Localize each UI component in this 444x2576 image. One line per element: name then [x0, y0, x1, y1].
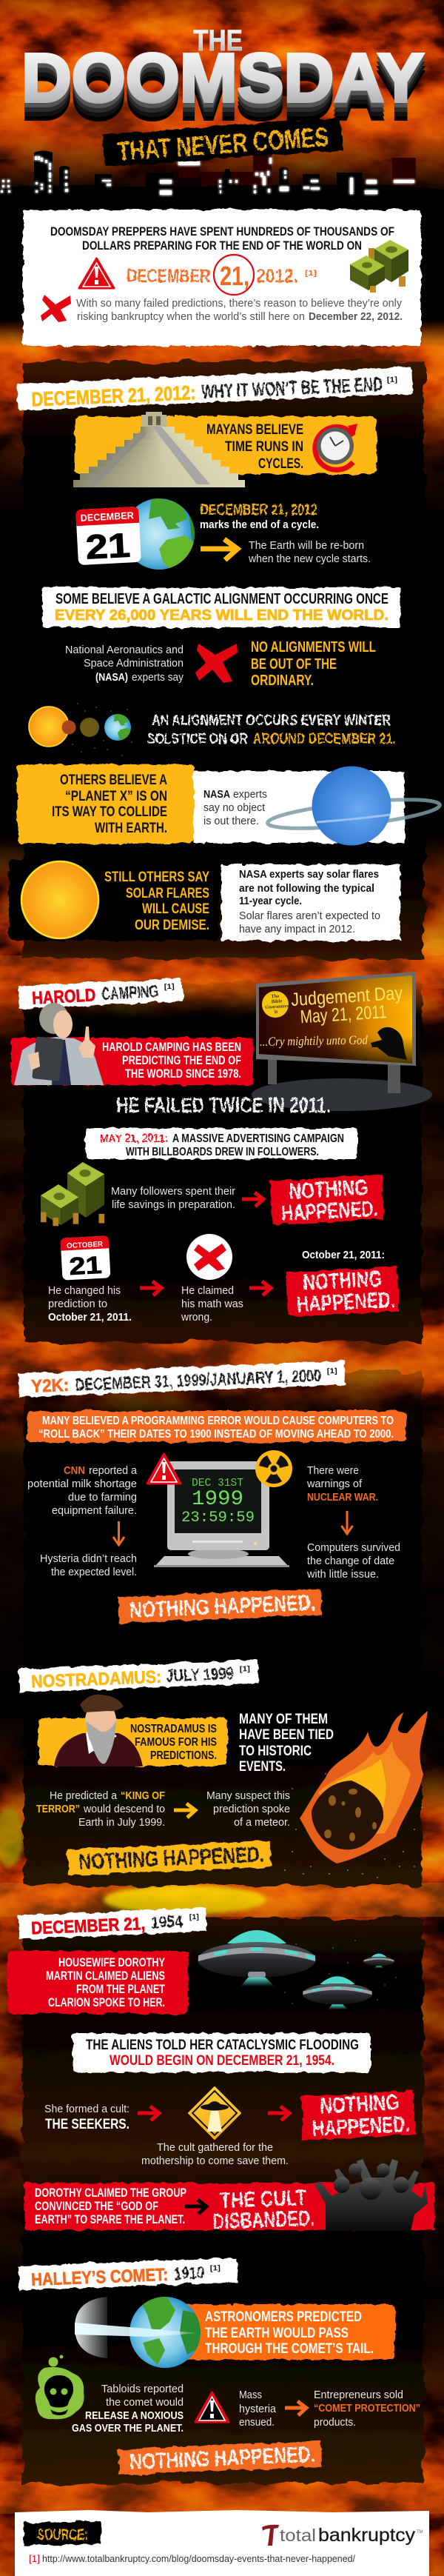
nuclear war text: warnings of: [306, 1478, 363, 1490]
nuclear war text: NUCLEAR WAR.: [307, 1492, 378, 1504]
date: december 21 2012: [1]: [305, 270, 317, 278]
section heading: nostradamus: [1]: [240, 1665, 250, 1674]
arrow: [174, 1803, 195, 1818]
intro body text: risking bankruptcy when the world’s still here on: [77, 310, 305, 323]
computers survived text: Computers survived: [307, 1542, 400, 1554]
disbanded reason text: EARTH” TO SPARE THE PLANET.: [35, 2213, 185, 2226]
tabloids text: Tabloids reported: [101, 2383, 184, 2395]
callout: nothing happened: [286, 1266, 400, 1318]
arrow: [140, 1281, 161, 1295]
followers text: [111, 1186, 235, 1211]
arrow: [268, 2106, 289, 2120]
computers survived text: [306, 1542, 400, 1581]
section heading: nostradamus: [18, 1660, 258, 1692]
panel: footer: [15, 2510, 429, 2576]
nostradamus text: NOSTRADAMUS IS: [130, 1723, 217, 1735]
intro headline: DOLLARS PREPARING FOR THE END OF THE WORLD ON: [82, 239, 362, 253]
callout: nothing happened: HAPPENED.: [280, 1196, 379, 1226]
no alignments text: NO ALIGNMENTS WILL: [251, 639, 376, 655]
panel: dorothy martin: [7, 1951, 188, 2014]
cycle subheading: marks the end of a cycle.: [200, 519, 319, 531]
solar response: [239, 869, 380, 935]
nostradamus text: PREDICTIONS.: [150, 1749, 217, 1762]
solar claim: SOLAR FLARES: [126, 885, 209, 901]
followers text: life savings in preparation.: [112, 1199, 235, 1211]
illustration: planet x with rings: [266, 766, 441, 846]
panel: may 21 2011 banner: WITH BILLBOARDS DREW IN FOLLOWERS.: [126, 1146, 319, 1158]
planet x claim: [52, 772, 167, 836]
nasa response: NASA: [204, 789, 230, 801]
illustration: ufos: [198, 1930, 396, 2009]
text: changed prediction: [48, 1285, 132, 1324]
illustration: billboard: The: [271, 994, 280, 999]
icon: x in circle: [186, 1234, 232, 1280]
section heading: halley's comet: HALLEY’S COMET:: [31, 2265, 169, 2290]
icon: calendar october 21: 21: [69, 1251, 102, 1280]
the cult disbanded text: [212, 2186, 315, 2234]
panel: solar flares: [9, 859, 400, 941]
solar claim: [104, 869, 209, 933]
illustration: y2k computer: 1999: [192, 1488, 243, 1511]
arrow: [242, 1192, 263, 1207]
disbanded reason text: CONVINCED THE “GOD OF: [35, 2200, 158, 2213]
arrow: [285, 2401, 306, 2415]
planet x claim: “PLANET X” IS ON: [65, 788, 167, 804]
title word: doomsday: DOOMSDAY: [21, 39, 424, 116]
illustration: sun: [21, 861, 98, 938]
cycle date heading: DECEMBER 21, 2012: [200, 501, 317, 518]
section heading: halley's comet: 1910: [174, 2263, 204, 2283]
alignment statement: [147, 713, 396, 747]
no alignments text: ORDINARY.: [251, 673, 314, 689]
historic events text: HAVE BEEN TIED: [239, 1726, 334, 1743]
panel: nostradamus: [38, 1695, 227, 1766]
logo: total bankruptcy: bankruptcy: [318, 2525, 416, 2546]
arrow: [138, 2106, 159, 2120]
solar claim: OUR DEMISE.: [135, 917, 209, 933]
planet x claim: OTHERS BELIEVE A: [60, 772, 167, 788]
section heading: december 21 2012: [18, 367, 413, 411]
hysteria text: Hysteria didn’t reach: [40, 1553, 137, 1565]
text: changed prediction: prediction to: [48, 1298, 107, 1310]
logo: total bankruptcy: TM: [417, 2530, 423, 2535]
hysteria text: the expected level.: [51, 1566, 137, 1578]
rebirth text: when the new cycle starts.: [248, 553, 371, 565]
panel: harold intro: [11, 1003, 253, 1085]
callout: nothing happened: NOTHING: [289, 1175, 369, 1204]
panel: may 21 2011 banner: MAY 21, 2011:: [100, 1132, 168, 1145]
astronomers text: [205, 2309, 374, 2357]
followers text: Many followers spent their: [111, 1186, 235, 1198]
illustration: billboard: [252, 972, 432, 1111]
mass hysteria text: ensued.: [239, 2417, 275, 2429]
intro headline: [50, 225, 394, 253]
alignment statement: AROUND DECEMBER 21.: [253, 731, 396, 747]
harold intro text: THE WORLD SINCE 1978.: [125, 1067, 241, 1081]
ufo small: [363, 1954, 394, 1968]
title: [21, 24, 424, 167]
solar response: have any impact in 2012.: [239, 924, 355, 935]
nasa says text: National Aeronautics and: [65, 644, 184, 656]
section heading: december 21 1954: [1]: [189, 1913, 199, 1922]
nasa response: say no object: [204, 802, 265, 814]
computers survived text: with little issue.: [306, 1569, 379, 1581]
panel: y2k belief: [27, 1411, 406, 1442]
icon: money stacks: [350, 240, 408, 293]
callout: nothing happened: HAPPENED.: [312, 2112, 411, 2141]
prediction text: would descend to: [83, 1803, 165, 1815]
icon: warning triangle: [195, 2392, 229, 2422]
hysteria text: [40, 1553, 137, 1578]
section heading: december 21 1954: 1954: [150, 1912, 184, 1932]
nuclear war text: [306, 1465, 378, 1504]
tabloids text: the comet would: [106, 2397, 184, 2409]
source citation: http://www.totalbankruptcy.com/blog/doomsday-events-that-never-happened/: [42, 2553, 355, 2564]
section heading: december 21 2012: [1]: [387, 376, 397, 384]
planet x claim: WITH EARTH.: [95, 820, 167, 836]
solar claim: WILL CAUSE: [142, 901, 209, 917]
illustration: billboard: May 21, 2011: [300, 1001, 387, 1027]
tabloids text: RELEASE A NOXIOUS: [85, 2410, 184, 2422]
icon: warning triangle: [147, 1454, 181, 1484]
icon: calendar december 21: DECEMBER: [80, 510, 135, 524]
logo: total bankruptcy: total: [280, 2526, 316, 2545]
icon: calendar october 21: [61, 1235, 110, 1281]
alignment statement: SOLSTICE ON OR: [147, 731, 248, 747]
text: changed prediction: October 21, 2011.: [48, 1312, 132, 1324]
entrepreneurs text: [314, 2389, 420, 2429]
solar response: Solar flares aren’t expected to: [239, 910, 380, 922]
date: october 21 2011: October 21, 2011:: [302, 1249, 385, 1261]
dark panel: 1954 and halley sections: [22, 1918, 423, 2483]
callout: nothing happened: NOTHING HAPPENED.: [129, 2443, 316, 2475]
illustration: meteor: [285, 1711, 428, 1878]
icon: calendar december 21: [75, 507, 141, 567]
no alignments text: [251, 639, 376, 689]
mothership text: [141, 2142, 289, 2167]
section heading: y2k: Y2K:: [31, 1375, 70, 1397]
text: math wrong: He claimed: [181, 1285, 234, 1297]
illustration: billboard: ...Cry mightily unto God: [260, 1032, 368, 1049]
nasa response: is out there.: [204, 815, 259, 827]
callout: nothing happened: HAPPENED.: [296, 1287, 396, 1317]
astronomers text: THROUGH THE COMET’S TAIL.: [205, 2340, 374, 2357]
section heading: halley's comet: [1]: [210, 2264, 221, 2273]
dark panel: december 21 2012 section: [23, 361, 424, 958]
illustration: crowd: [314, 2159, 428, 2231]
seekers text: THE SEEKERS.: [45, 2117, 130, 2132]
callout: nothing happened: NOTHING HAPPENED.: [78, 1843, 265, 1875]
panel: cult disbanded: [24, 2159, 434, 2234]
source citation: [1]: [29, 2553, 40, 2564]
mayans text: CYCLES.: [258, 456, 303, 472]
the cult disbanded text: DISBANDED.: [212, 2206, 315, 2234]
historic events text: MANY OF THEM: [239, 1711, 328, 1727]
icon: warning triangle: [79, 258, 114, 288]
cnn text: reported a: [89, 1465, 138, 1477]
mayans text: TIME RUNS IN: [225, 438, 303, 455]
entrepreneurs text: products.: [314, 2417, 356, 2429]
tabloids text: [72, 2383, 184, 2435]
disbanded reason text: DOROTHY CLAIMED THE GROUP: [35, 2186, 186, 2200]
text: math wrong: [181, 1285, 243, 1324]
rebirth text: [248, 540, 371, 565]
icon: calendar october 21: OCTOBER: [67, 1241, 104, 1250]
the cult disbanded text: THE CULT: [220, 2186, 307, 2213]
seekers text: [44, 2103, 130, 2132]
arrow: [249, 1281, 271, 1295]
planet x claim: ITS WAY TO COLLIDE: [52, 804, 167, 820]
panel: dorothy martin: FROM THE PLANET: [76, 1983, 165, 1996]
callout: nothing happened: NOTHING: [302, 1267, 383, 1295]
nasa response: experts: [233, 789, 267, 801]
arrow: [185, 2200, 206, 2214]
historic events text: [239, 1711, 334, 1775]
alignment statement: AN ALIGNMENT OCCURS EVERY WINTER: [152, 713, 391, 729]
callout: nothing happened: [300, 2089, 416, 2142]
section heading: halley's comet: [18, 2258, 238, 2291]
callout: nothing happened: [270, 1175, 385, 1227]
illustration: nostradamus portrait: [54, 1695, 143, 1766]
historic events text: EVENTS.: [239, 1758, 286, 1775]
nasa says text: Space Administration: [84, 658, 184, 670]
nasa says text: (NASA): [95, 672, 128, 684]
section heading: y2k: DECEMBER 31, 1999/JANUARY 1, 2000: [75, 1366, 321, 1395]
icon: calendar december 21: 21: [84, 525, 131, 567]
icon: ufo road sign: [189, 2087, 240, 2139]
section heading: y2k: [18, 1361, 345, 1397]
panel: end of a cycle: [75, 497, 371, 573]
historic events text: TO HISTORIC: [239, 1743, 312, 1759]
source label: [24, 2521, 101, 2546]
nostradamus text: FAMOUS FOR HIS: [135, 1736, 217, 1749]
disbanded reason text: [35, 2186, 186, 2226]
harold intro text: [102, 1041, 241, 1081]
nasa says text: experts say: [132, 672, 184, 684]
meteor suspicion text: prediction spoke: [213, 1803, 290, 1815]
illustration: billboard: Guarantees: [265, 1004, 289, 1010]
logo: total bankruptcy: [262, 2525, 423, 2546]
section heading: december 21 2012: DECEMBER 21, 2012:: [31, 381, 196, 411]
section heading: harold camping: [1]: [164, 983, 175, 991]
panel: mayans: [73, 412, 377, 487]
section heading: nostradamus: NOSTRADAMUS:: [31, 1667, 162, 1692]
illustration: comet and earth: [75, 2294, 202, 2368]
cnn text: CNN: [64, 1465, 85, 1477]
panel: planet x: [18, 764, 441, 846]
panel: dorothy martin: HOUSEWIFE DOROTHY: [58, 1956, 165, 1969]
illustration: billboard: Judgement Day: [290, 983, 403, 1010]
prediction text: “KING OF: [121, 1790, 165, 1802]
mayans text: MAYANS BELIEVE: [206, 421, 303, 438]
ufo large: [198, 1930, 316, 1986]
dark panel: harold camping section: [24, 982, 422, 1342]
mass hysteria text: Mass: [239, 2389, 262, 2401]
cnn text: potential milk shortage: [27, 1478, 137, 1490]
solar claim: STILL OTHERS SAY: [104, 869, 209, 885]
cnn text: equipment failure.: [52, 1505, 137, 1517]
text: math wrong: wrong.: [181, 1312, 212, 1324]
meteor suspicion text: of a meteor.: [234, 1817, 290, 1829]
mayans text: [206, 421, 303, 472]
entrepreneurs text: “COMET PROTECTION”: [314, 2403, 420, 2415]
mass hysteria text: [239, 2389, 277, 2429]
icon: radiation sign: [255, 1450, 292, 1487]
mothership text: The cult gathered for the: [157, 2142, 273, 2154]
no alignments text: BE OUT OF THE: [251, 656, 337, 673]
cnn text: due to farming: [68, 1492, 137, 1504]
intro body text: With so many failed predictions, there’s reason to believe they’re only: [76, 297, 402, 310]
nasa response: [204, 789, 267, 827]
illustration: y2k computer: [147, 1450, 292, 1567]
solar response: NASA experts say solar flares: [239, 869, 379, 881]
arrow: [201, 539, 238, 560]
entrepreneurs text: Entrepreneurs sold: [314, 2389, 403, 2401]
panel: cataclysmic flooding: WOULD BEGIN ON DECEMBER 21, 1954.: [110, 2053, 334, 2069]
section heading: y2k: [1]: [327, 1367, 337, 1375]
tabloids text: GAS OVER THE PLANET.: [72, 2423, 184, 2435]
text: changed prediction: He changed his: [48, 1285, 121, 1297]
panel: cataclysmic flooding: [73, 2033, 371, 2072]
illustration: harold camping: [14, 1003, 104, 1085]
callout: nothing happened: NOTHING: [319, 2090, 400, 2119]
arrow: [113, 1521, 124, 1545]
dark panel: y2k and nostradamus sections: [24, 1372, 422, 1886]
date: december 21 2012: 21,: [220, 261, 249, 291]
nostradamus text: [130, 1723, 217, 1762]
prediction text: TERROR”: [36, 1803, 80, 1815]
panel: dorothy martin: MARTIN CLAIMED ALIENS: [46, 1969, 165, 1983]
icon: toxic gas cloud with skull: [36, 2355, 84, 2419]
source label: SOURCE:: [37, 2526, 88, 2543]
meteor suspicion text: Many suspect this: [206, 1790, 290, 1802]
cnn text: [27, 1465, 138, 1517]
panel: astronomers: [75, 2294, 395, 2368]
city skyline: [0, 151, 444, 215]
icon: red x: [195, 644, 238, 683]
prediction text: He predicted a: [50, 1790, 118, 1802]
icon: red x: [41, 295, 71, 322]
date: december 21 2012: DECEMBER: [127, 266, 210, 287]
arrow: [342, 1511, 352, 1534]
mothership text: mothership to come save them.: [141, 2155, 289, 2167]
harold intro text: PREDICTING THE END OF: [122, 1054, 241, 1067]
panel: may 21 2011 banner: [85, 1128, 357, 1159]
solar response: 11-year cycle.: [239, 895, 302, 907]
panel: may 21 2011 banner: A MASSIVE ADVERTISING CAMPAIGN: [172, 1132, 344, 1145]
illustration: planets aligned: [29, 704, 132, 755]
ufo medium: [303, 1976, 372, 2009]
intro body text: [76, 297, 403, 323]
illustration: billboard: It: [274, 1010, 278, 1015]
harold intro text: HAROLD CAMPING HAS BEEN: [102, 1041, 241, 1054]
panel: galactic alignment: EVERY 26,000 YEARS WILL END THE WORLD.: [55, 607, 388, 624]
section heading: nostradamus: JULY 1999: [166, 1664, 234, 1686]
icon: money stacks: [41, 1162, 104, 1226]
title word: the: THE: [193, 24, 243, 57]
seekers text: She formed a cult:: [44, 2103, 130, 2115]
solar response: are not following the typical: [239, 883, 374, 895]
illustration: billboard: Bible: [272, 999, 283, 1004]
computers survived text: the change of date: [307, 1555, 394, 1567]
illustration: y2k computer: 23:59:59: [181, 1509, 255, 1526]
astronomers text: ASTRONOMERS PREDICTED: [205, 2309, 362, 2325]
nasa says text: [65, 644, 184, 684]
panel: cataclysmic flooding: THE ALIENS TOLD HER CATACLYSMIC FLOODING: [86, 2038, 359, 2053]
meteor suspicion text: [206, 1790, 290, 1829]
section heading: harold camping: HAROLD: [32, 985, 96, 1009]
astronomers text: THE EARTH WOULD PASS: [205, 2325, 349, 2341]
heading: he failed twice: HE FAILED TWICE IN 2011.: [116, 1094, 331, 1118]
title banner: that never comes: THAT NEVER COMES: [116, 121, 329, 167]
mass hysteria text: hysteria: [239, 2403, 277, 2415]
text: math wrong: his math was: [181, 1298, 243, 1310]
panel: dorothy martin: CLARION SPOKE TO HER.: [48, 1996, 165, 2009]
icon: clock: [315, 424, 357, 470]
section heading: harold camping: CAMPING: [101, 981, 159, 1004]
section heading: december 21 1954: DECEMBER 21,: [31, 1914, 146, 1939]
illustration: pyramid: [73, 412, 245, 487]
panel: intro: [23, 210, 421, 346]
date: december 21 2012: [127, 255, 317, 295]
date: december 21 2012: 2012.: [256, 266, 298, 287]
illustration: y2k computer: DEC 31ST: [192, 1477, 243, 1489]
section heading: harold camping: [18, 978, 183, 1010]
prediction text: Earth in July 1999.: [78, 1817, 165, 1829]
rebirth text: The Earth will be re-born: [249, 540, 364, 552]
nuclear war text: There were: [307, 1465, 359, 1477]
prediction text: [36, 1790, 165, 1829]
icon: earth: [136, 498, 195, 570]
callout: nothing happened: NOTHING HAPPENED.: [129, 1591, 316, 1623]
intro body text: December 22, 2012.: [309, 310, 403, 323]
section heading: december 21 1954: [18, 1908, 207, 1939]
panel: galactic alignment: [42, 587, 400, 627]
